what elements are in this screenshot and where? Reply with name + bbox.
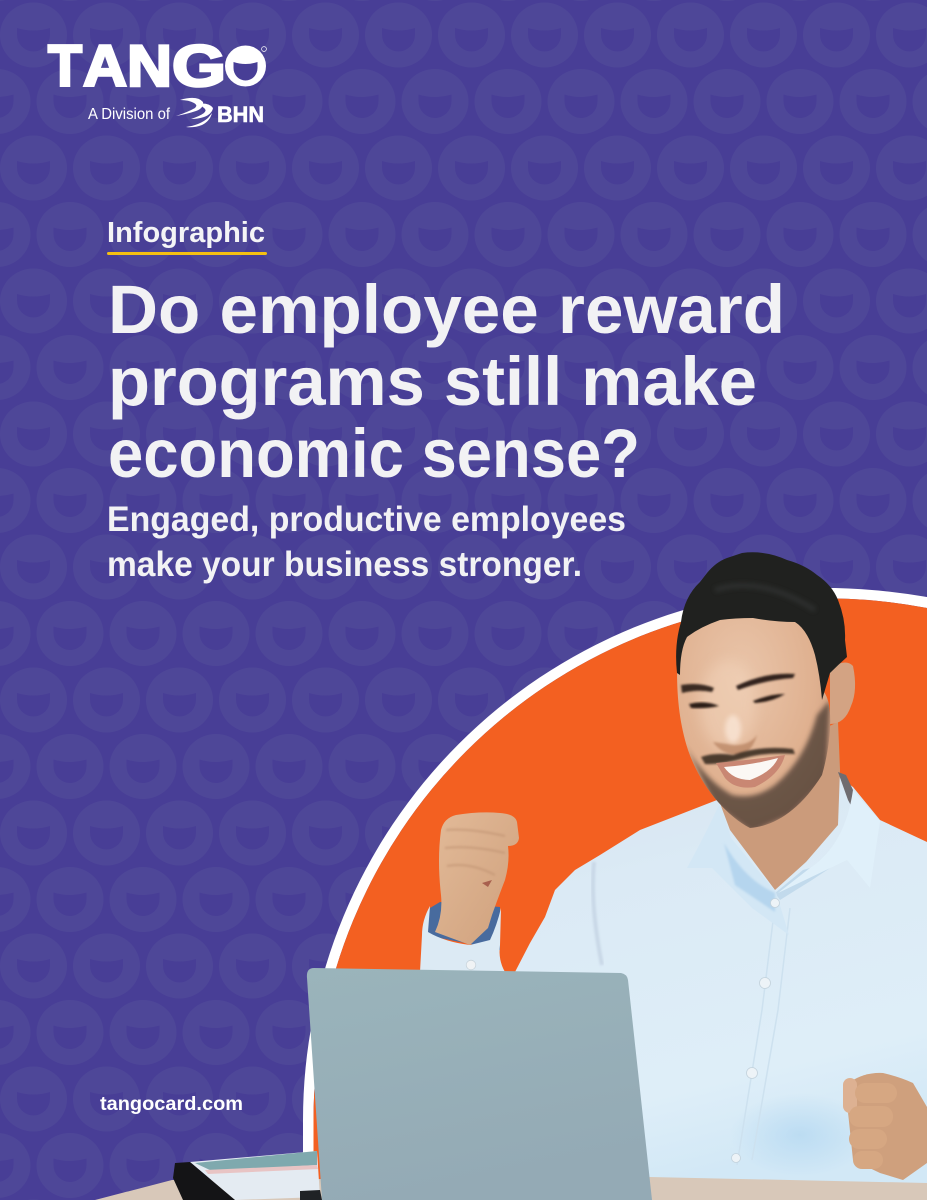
collar shadow [724, 843, 775, 912]
mouth [716, 755, 785, 788]
title: economic sense? [108, 415, 640, 492]
shirt body [500, 770, 927, 1200]
collar left [687, 803, 789, 935]
orange circle with white ring [303, 588, 927, 1200]
hair [676, 552, 847, 700]
eyebrow label: Infographic: Infographic [107, 217, 265, 249]
logo wordmark [48, 34, 266, 99]
left brow [681, 684, 714, 693]
inner collar [775, 858, 845, 900]
face [677, 598, 830, 828]
nose shadow [713, 735, 757, 755]
logo wordmark: O [229, 41, 266, 94]
orange disc [314, 598, 927, 1200]
title [108, 271, 785, 492]
raised cuff [420, 902, 505, 972]
table top [95, 1177, 927, 1200]
logo BHN: BHN [217, 102, 264, 127]
logo wordmark: T [48, 34, 82, 99]
fingers [849, 1083, 897, 1169]
shirt placket [737, 905, 790, 1165]
collar right [778, 790, 880, 893]
ear [830, 662, 855, 724]
right eye [753, 694, 785, 703]
website link: tangocard.com [100, 1093, 243, 1115]
icon: BHN swoosh [176, 98, 213, 127]
moustache [701, 748, 795, 764]
neck [718, 722, 840, 890]
right brow [736, 674, 795, 690]
subtitle: Engaged, productive employees [107, 500, 626, 539]
title: Do employee reward [108, 271, 785, 348]
logo wordmark: N [127, 34, 172, 99]
cheek highlight [701, 665, 752, 744]
back of hand [848, 1073, 927, 1180]
subtitle: make your business stronger. [107, 545, 582, 584]
shirt buttons [732, 898, 780, 1162]
photo: smiling man at laptop [95, 552, 927, 1200]
beard [685, 700, 830, 832]
logo: Tango, a division of BHN [48, 34, 266, 127]
thumb [843, 1078, 857, 1113]
right fist [843, 1073, 927, 1180]
raised fist [435, 812, 519, 945]
subtitle [107, 500, 626, 584]
logo division line: A Division of [88, 106, 171, 123]
title: programs still make [108, 343, 757, 420]
notebook [173, 1151, 322, 1200]
teeth [724, 758, 778, 780]
beard and face features [681, 660, 830, 832]
logo wordmark: A [83, 34, 127, 99]
sleeve seam [593, 862, 602, 965]
inner collar band [838, 772, 856, 815]
left eye [689, 702, 719, 708]
blue fold near hand [730, 1093, 870, 1177]
hair highlight [715, 586, 815, 610]
laptop lid [307, 968, 652, 1200]
logo wordmark: G [172, 34, 226, 99]
